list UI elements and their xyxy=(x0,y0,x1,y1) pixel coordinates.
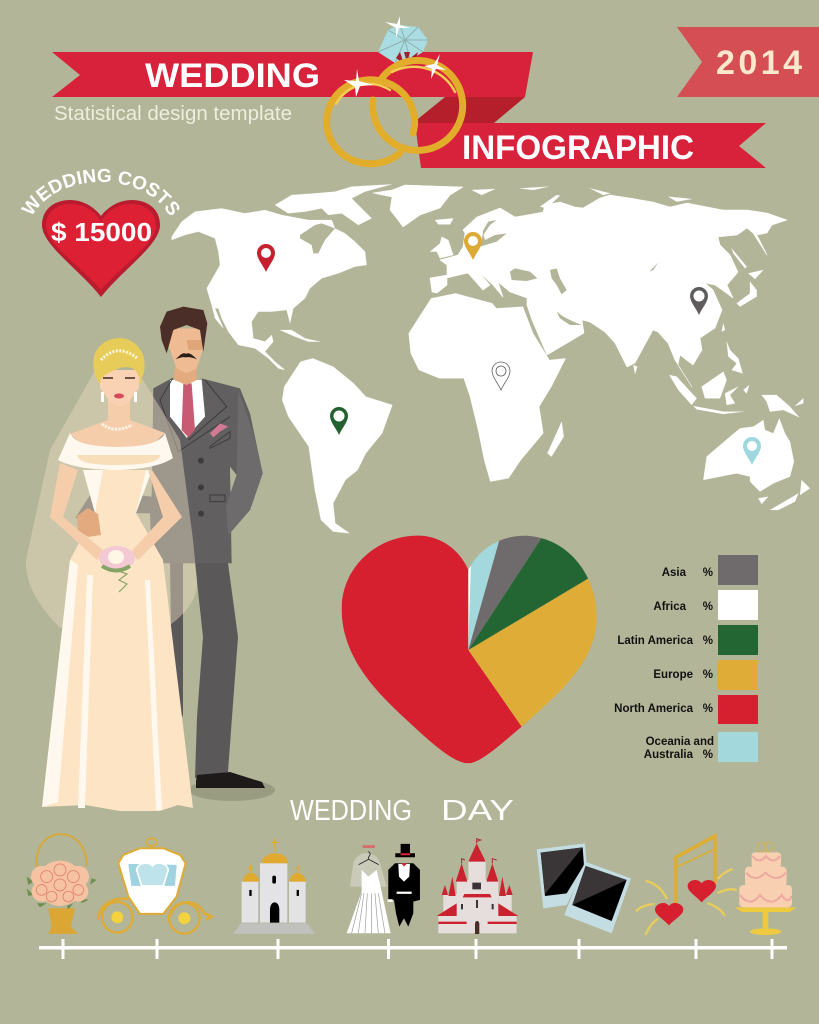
legend: Africa xyxy=(653,590,758,620)
subtitle: Statistical design template xyxy=(54,103,292,125)
icon: carriage xyxy=(98,838,212,934)
lapel lines and buttons xyxy=(160,380,230,502)
legend: North America xyxy=(614,695,758,724)
cost value: $ 15000 xyxy=(51,217,152,247)
title banner: wedding ribbon xyxy=(52,52,533,123)
earrings xyxy=(101,392,137,402)
bouquet xyxy=(99,546,135,592)
year: 2014 xyxy=(716,44,802,82)
icon: diamond xyxy=(378,25,428,64)
legend: Europe: Europe xyxy=(653,669,693,681)
icon: photographs xyxy=(537,843,631,933)
timeline xyxy=(39,939,787,959)
legend: Latin America: % xyxy=(703,635,713,647)
shoulders xyxy=(70,395,165,447)
heart pie chart xyxy=(342,536,596,764)
collar xyxy=(58,433,173,470)
figure: bride xyxy=(42,338,193,811)
islands: Tasmania and New Zealand xyxy=(758,480,810,510)
illustration: couple xyxy=(26,307,275,811)
islands: East Asia xyxy=(590,188,763,332)
photo two xyxy=(564,862,631,933)
continent: South America xyxy=(282,358,392,533)
legend: Asia: Asia xyxy=(662,567,687,579)
arms xyxy=(50,463,182,560)
legend: Oceania and Australia xyxy=(644,732,758,762)
continent: Africa xyxy=(409,293,566,482)
face xyxy=(167,328,203,373)
icon: flower basket xyxy=(27,834,97,934)
heart: wedding costs xyxy=(42,200,160,297)
island: Greenland xyxy=(373,185,463,227)
dress highlights xyxy=(42,560,162,810)
islands: Arctic Canada xyxy=(275,184,392,225)
legend: North America: North America xyxy=(614,703,694,715)
legend: Oceania and Australia: Oceania and xyxy=(646,736,714,748)
pin: Oceania xyxy=(743,437,761,465)
legend: Africa: % xyxy=(703,601,713,613)
legend: Oceania and Australia: Australia xyxy=(644,749,694,761)
tie xyxy=(182,383,195,437)
shoes xyxy=(196,772,265,788)
legend: North America: % xyxy=(703,703,713,715)
pin: Latin America xyxy=(330,407,348,435)
year flag xyxy=(677,27,819,97)
continent: North America xyxy=(172,208,367,370)
legend: Latin America xyxy=(617,625,758,655)
islands: Europe and Arctic xyxy=(430,187,560,258)
pin: North America xyxy=(257,244,275,272)
continent: Eurasia xyxy=(430,195,787,387)
inland seas: Baltic, Black, Caspian, Persian Gulf xyxy=(480,220,582,325)
legend: Asia xyxy=(662,555,758,585)
sleeve shade xyxy=(226,390,263,535)
curved label: wedding costs: WEDDING COSTS xyxy=(20,168,180,215)
eyes and lips xyxy=(103,377,135,379)
lake: Baikal xyxy=(649,262,658,272)
islands: South East Asia xyxy=(633,342,803,417)
legend: Europe: % xyxy=(703,669,713,681)
island: Cuba xyxy=(280,330,320,342)
legend: Africa: Africa xyxy=(653,601,687,613)
icon: tuxedo xyxy=(388,844,420,927)
pin: Europe xyxy=(464,232,482,260)
tiara xyxy=(101,351,138,360)
icon: castle xyxy=(437,839,518,934)
legend: Asia: % xyxy=(703,567,713,579)
legend: Oceania and Australia: % xyxy=(703,749,713,761)
photo one xyxy=(537,843,587,908)
legend: Latin America: Latin America xyxy=(617,635,694,647)
pin: Africa xyxy=(492,362,510,390)
shirt xyxy=(170,380,205,437)
hair xyxy=(160,307,207,353)
dress skirt xyxy=(42,470,193,811)
bodice highlight xyxy=(83,470,152,513)
icon: church xyxy=(233,838,315,934)
jacket xyxy=(75,377,263,563)
hair xyxy=(93,338,145,385)
ground shadow xyxy=(189,779,275,801)
face xyxy=(99,370,140,407)
icon: wedding dress on hanger xyxy=(347,847,391,933)
heading: wedding day: WEDDING xyxy=(290,795,412,827)
groom hand xyxy=(77,508,101,537)
legend: Europe xyxy=(653,660,758,690)
heading: wedding day: DAY xyxy=(441,795,514,827)
pin: Asia xyxy=(690,287,708,315)
chart legend xyxy=(614,555,758,762)
world map xyxy=(172,184,810,533)
continent: Australia xyxy=(703,418,794,492)
title: WEDDING: WEDDING xyxy=(145,57,320,95)
bay: Hudson xyxy=(300,223,335,253)
necklace xyxy=(102,424,132,429)
icon: wedding cake xyxy=(735,842,797,935)
veil xyxy=(26,367,197,628)
trousers xyxy=(170,563,238,778)
icon: wedding rings xyxy=(327,16,463,164)
pocket square xyxy=(210,423,228,437)
title: INFOGRAPHIC: INFOGRAPHIC xyxy=(462,129,694,167)
figure: groom xyxy=(75,307,265,788)
icon: musical note with hearts xyxy=(637,836,736,934)
heading: wedding day xyxy=(290,795,514,827)
title banner: infographic ribbon xyxy=(415,123,766,168)
moustache xyxy=(176,353,197,359)
island: Madagascar xyxy=(547,422,564,457)
neck xyxy=(174,365,197,385)
